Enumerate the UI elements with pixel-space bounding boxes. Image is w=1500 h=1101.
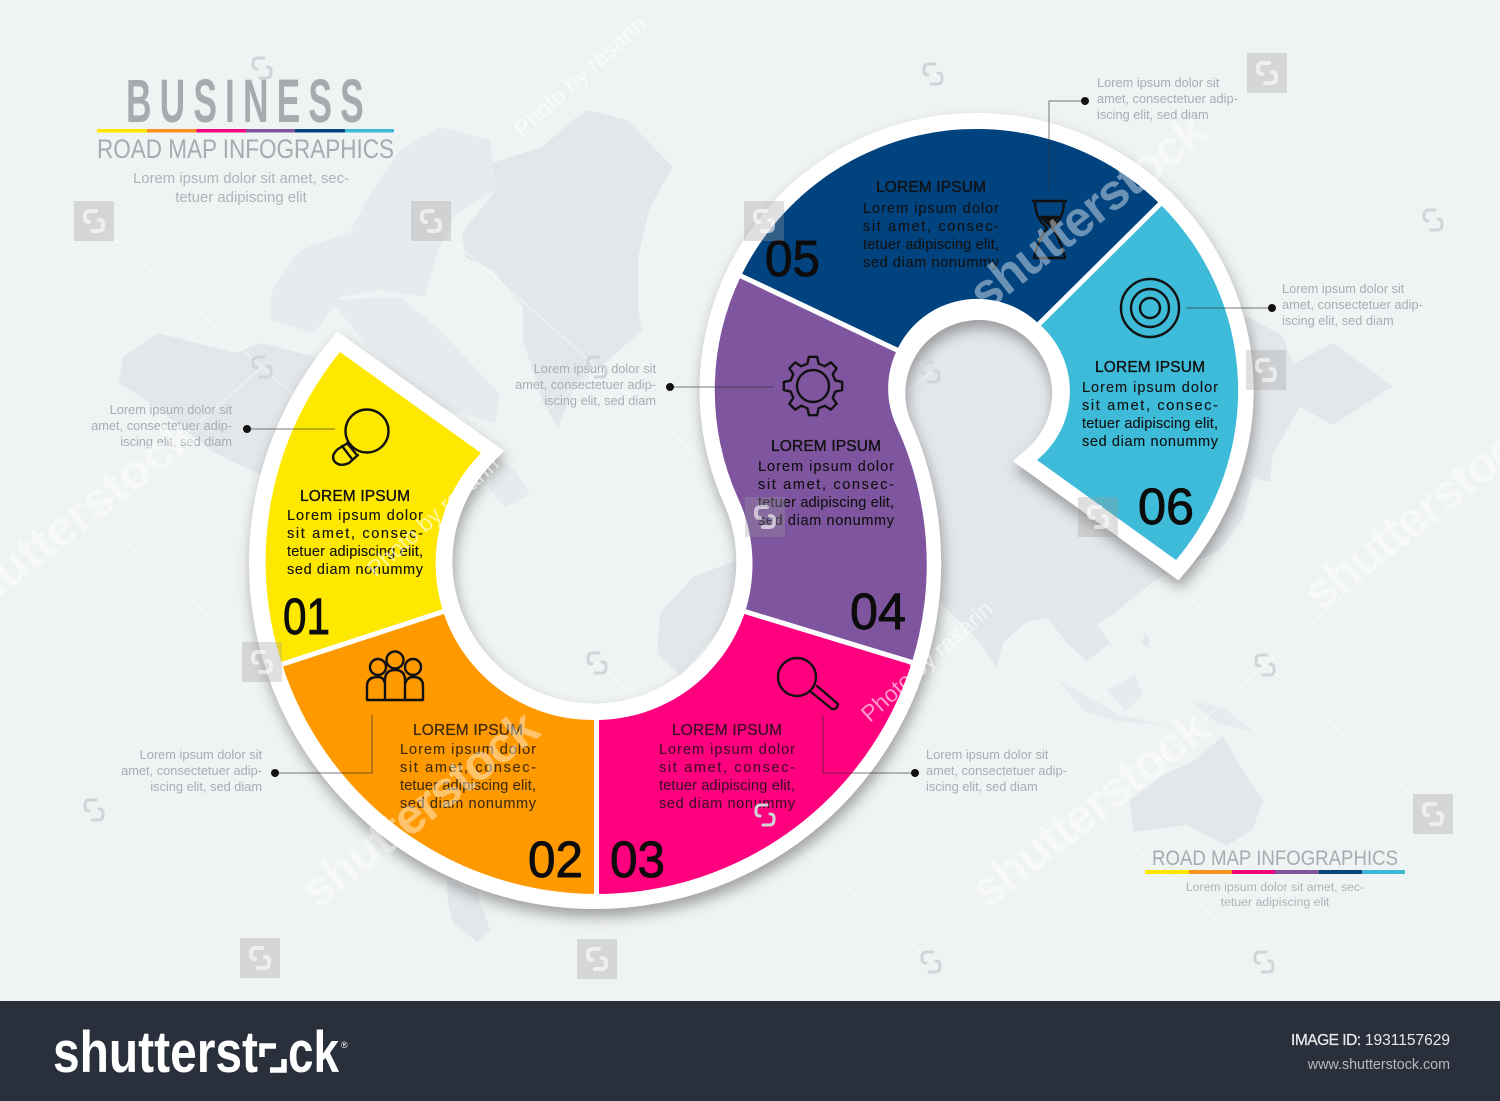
watermark: shutterstock [958, 102, 1217, 321]
number 03: 03 [610, 831, 665, 888]
white s-curve base [264, 128, 1239, 894]
callout: step 04 note [515, 361, 774, 408]
callout: step 05 note: iscing elit, sed diam [1097, 107, 1209, 122]
image id: IMAGE ID: 1931157629 [1291, 1032, 1450, 1049]
callout: step 03 note: amet, consectetuer adip- [926, 763, 1067, 778]
body 02: sed diam nonummy [400, 796, 537, 812]
callout: step 02 note [121, 715, 372, 794]
body 05: sed diam nonummy [863, 255, 1000, 271]
body 03: sit amet, consec- [659, 760, 795, 776]
body 05: tetuer adipiscing elit, [863, 237, 999, 253]
body 03: Lorem ipsum dolor [659, 742, 795, 758]
heading 03: LOREM IPSUM [672, 722, 782, 739]
body 06: tetuer adipiscing elit, [1082, 416, 1218, 432]
body 04: Lorem ipsum dolor [758, 459, 894, 475]
callout: step 03 note: Lorem ipsum dolor sit [926, 747, 1049, 762]
panel: step 04 [715, 276, 927, 662]
intro text: tetuer adipiscing elit [175, 190, 308, 206]
body 06: sit amet, consec- [1082, 398, 1218, 414]
body 05: Lorem ipsum dolor [863, 201, 999, 217]
footer logo: ck [288, 1020, 340, 1085]
callout: step 06 note: amet, consectetuer adip- [1282, 297, 1423, 312]
intro text: Lorem ipsum dolor sit amet, sec- [133, 171, 349, 187]
callout: step 06 note: Lorem ipsum dolor sit [1282, 281, 1405, 296]
callout: step 01 note: Lorem ipsum dolor sit [110, 402, 232, 417]
callout: step 01 note: amet, consectetuer adip- [91, 418, 232, 433]
callout: step 06 note: iscing elit, sed diam [1282, 313, 1394, 328]
heading 02: LOREM IPSUM [413, 722, 523, 739]
segment 06 [1037, 204, 1238, 560]
footnote heading: ROAD MAP INFOGRAPHICS [1152, 847, 1398, 870]
body 02: Lorem ipsum dolor [400, 742, 536, 758]
callout: step 06 note [1186, 281, 1423, 328]
panel: step 03 [596, 612, 912, 894]
callout: step 04 note: Lorem ipsum dolor sit [534, 361, 656, 376]
watermark: Photo by rasarin [362, 450, 504, 582]
callout: step 05 note: amet, consectetuer adip- [1097, 91, 1238, 106]
watermark: shutterstock [960, 699, 1219, 918]
body 04: sit amet, consec- [758, 477, 894, 493]
segment 04 [715, 276, 927, 662]
callout: step 02 note: iscing elit, sed diam [150, 779, 262, 794]
segment 02 [282, 611, 596, 894]
callout: step 04 note: iscing elit, sed diam [544, 393, 656, 408]
footnote text: Lorem ipsum dolor sit amet, sec- [1186, 880, 1364, 894]
heading 05: LOREM IPSUM [876, 179, 986, 196]
panel: step 06 [1037, 204, 1238, 560]
panel: step 05 [741, 129, 1160, 350]
body 06: sed diam nonummy [1082, 434, 1219, 450]
title block [97, 67, 394, 206]
footnote title block [1145, 847, 1405, 909]
number 02: 02 [528, 831, 583, 888]
icon: target [1121, 279, 1179, 337]
panel: step 02 [282, 611, 596, 894]
watermark: Photo by rasarin [856, 595, 998, 727]
icon: gear [784, 357, 842, 415]
body 01: tetuer adipiscing elit, [287, 544, 423, 560]
footer bar [0, 1001, 1500, 1101]
panel: step 01 [266, 352, 481, 664]
heading 01: LOREM IPSUM [300, 488, 410, 505]
body 06: Lorem ipsum dolor [1082, 380, 1218, 396]
footnote colour rule [1145, 870, 1405, 874]
body 04: sed diam nonummy [758, 513, 895, 529]
callout: step 02 note: Lorem ipsum dolor sit [140, 747, 262, 762]
body 04: tetuer adipiscing elit, [758, 495, 894, 511]
number 01: 01 [283, 588, 330, 645]
icon: hourglass [1033, 201, 1066, 258]
footnote text: tetuer adipiscing elit [1221, 895, 1330, 909]
callout: step 04 note: amet, consectetuer adip- [515, 377, 656, 392]
footer logo: shutterst [53, 1020, 258, 1085]
subheading: ROAD MAP INFOGRAPHICS [97, 134, 394, 164]
segment 01 [266, 352, 481, 664]
callout: step 03 note: iscing elit, sed diam [926, 779, 1038, 794]
callout: step 05 note: Lorem ipsum dolor sit [1097, 75, 1220, 90]
icon: magnifier [778, 658, 838, 709]
footer logo: ® [341, 1040, 348, 1050]
watermark: Photo by rasarin [509, 10, 651, 142]
body 01: sed diam nonummy [287, 562, 424, 578]
number 06: 06 [1138, 478, 1194, 535]
callout: step 01 note [91, 402, 335, 449]
callout: step 02 note: amet, consectetuer adip- [121, 763, 262, 778]
icon: people [367, 652, 423, 700]
watermark: shutterstock [290, 699, 549, 918]
callout: step 01 note: iscing elit, sed diam [120, 434, 232, 449]
colour rule [97, 129, 394, 132]
icon: light bulb [333, 410, 388, 465]
number 04: 04 [850, 583, 906, 640]
body 01: sit amet, consec- [287, 526, 423, 542]
world map [119, 110, 1393, 942]
body 05: sit amet, consec- [863, 219, 999, 235]
heading 06: LOREM IPSUM [1095, 359, 1205, 376]
heading 04: LOREM IPSUM [771, 438, 881, 455]
body 03: tetuer adipiscing elit, [659, 778, 795, 794]
body 02: tetuer adipiscing elit, [400, 778, 536, 794]
number 05: 05 [765, 230, 820, 287]
website: www.shutterstock.com [1307, 1057, 1450, 1073]
segment 05 [741, 129, 1160, 350]
body 01: Lorem ipsum dolor [287, 508, 423, 524]
callout: step 05 note [1049, 75, 1238, 190]
body 02: sit amet, consec- [400, 760, 536, 776]
heading: business: BUSINESS [126, 67, 372, 135]
callout: step 03 note [823, 715, 1067, 794]
segment 03 [596, 612, 912, 894]
body 03: sed diam nonummy [659, 796, 796, 812]
